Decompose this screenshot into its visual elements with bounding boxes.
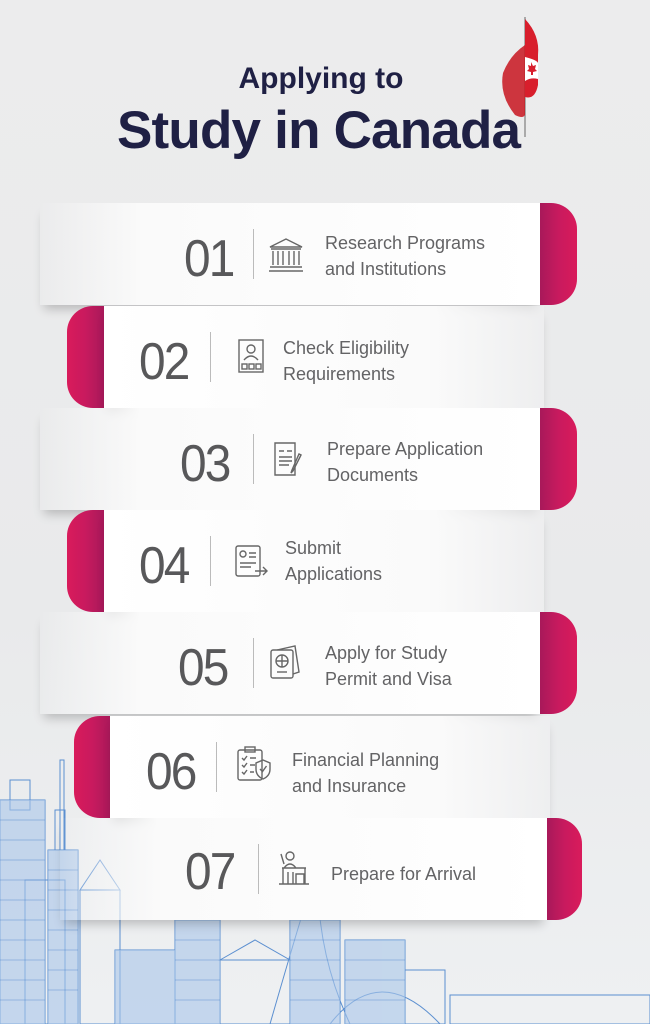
card 04: 04	[139, 537, 189, 595]
card 02: Requirements	[283, 364, 395, 384]
number 01: 01	[184, 230, 234, 288]
icon: submit	[235, 545, 268, 577]
card 01: and Institutions	[325, 259, 446, 279]
card 06: Financial Planning	[292, 750, 439, 770]
card 07: Prepare for Arrival	[331, 864, 476, 884]
card 06: 06	[146, 743, 196, 801]
icon: arrival	[279, 851, 309, 885]
card 05	[39, 612, 577, 723]
icon: documents	[274, 442, 302, 476]
card 02: 02	[139, 333, 189, 391]
title	[117, 62, 522, 160]
card 01	[39, 203, 577, 314]
card 05: Apply for Study	[325, 643, 447, 663]
card 04: Submit	[285, 538, 341, 558]
card 07	[59, 818, 582, 929]
card 03: 03	[180, 435, 230, 493]
card 07: 07	[185, 843, 235, 901]
card 06: and Insurance	[292, 776, 406, 796]
card 03: Prepare Application	[327, 439, 483, 459]
card 05: Permit and Visa	[325, 669, 452, 689]
card 04	[67, 510, 545, 614]
card 06	[74, 716, 551, 823]
card 05: 05	[178, 639, 228, 697]
icon: canadian flag	[502, 17, 538, 137]
title: Study in Canada	[117, 101, 520, 160]
icon: candidate	[238, 339, 264, 373]
card 03: Documents	[327, 465, 418, 485]
card 04: Applications	[285, 564, 382, 584]
skyline background	[0, 760, 650, 1024]
title: Applying to	[238, 62, 403, 95]
card 02: Check Eligibility	[283, 338, 409, 358]
card 01: Research Programs	[325, 233, 485, 253]
icon: institution	[269, 238, 303, 272]
card 02	[67, 306, 545, 410]
icon: insurance checklist	[237, 746, 271, 781]
icon: passport	[270, 645, 300, 679]
card 03	[39, 408, 577, 519]
